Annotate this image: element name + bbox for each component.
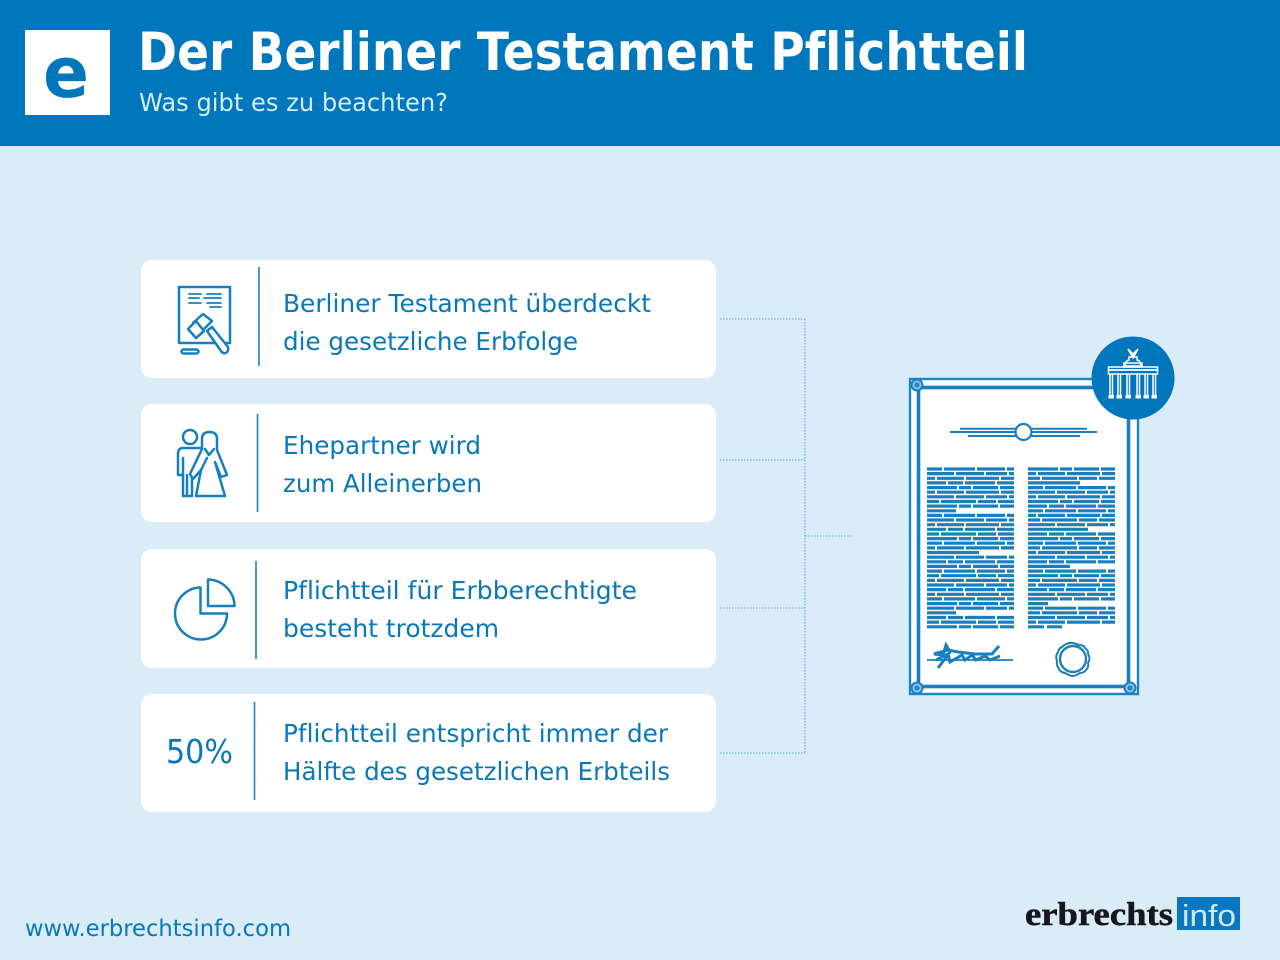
signature (927, 645, 1013, 668)
logo: e mark: e (43, 32, 89, 114)
text: card 3 (283, 576, 637, 643)
badge: Brandenburg Gate (1092, 336, 1174, 420)
logo: e mark (25, 30, 110, 115)
figure: 50 percent: 50% (166, 732, 233, 771)
subtitle: Was gibt es zu beachten? (139, 88, 448, 117)
text: card 2: zum Alleinerben (283, 469, 482, 498)
text: card 2: Ehepartner wird (283, 431, 481, 460)
icon: document with gavel (179, 287, 230, 354)
header banner (0, 0, 1280, 146)
text: card 4: Hälfte des gesetzlichen Erbteils (283, 757, 670, 786)
brand logo: erbrechts info (1025, 897, 1240, 933)
text: card 2 (283, 431, 482, 498)
text: card 4: Pflichtteil entspricht immer der (283, 719, 669, 748)
text: card 1 (283, 289, 651, 356)
text: card 3: Pflichtteil für Erbberechtigte (283, 576, 637, 605)
brand logo: erbrechts info: erbrechts (1025, 897, 1173, 933)
text: card 4 (283, 719, 670, 786)
connector lines (720, 319, 851, 753)
document right text column (1028, 469, 1115, 627)
document left text column (927, 469, 1014, 627)
icon: pie chart (175, 580, 234, 639)
panel: card 1 (141, 260, 716, 378)
text: card 1: Berliner Testament überdeckt (283, 289, 651, 318)
panel: card 3 (141, 549, 716, 668)
footer url: www.erbrechtsinfo.com (25, 916, 291, 942)
panel: card 2 (141, 404, 716, 522)
icon: married couple (178, 430, 227, 496)
document corner ornaments (912, 380, 1136, 694)
text: card 1: die gesetzliche Erbfolge (283, 327, 578, 356)
title: Der Berliner Testament Pflichtteil (138, 22, 1028, 83)
brand logo: erbrechts info: info (1182, 898, 1236, 933)
panel: card 4 (141, 694, 716, 812)
document: Berlin testament (910, 379, 1138, 694)
document heading ornament (950, 424, 1097, 440)
wax seal (1056, 643, 1090, 676)
text: card 3: besteht trotzdem (283, 614, 499, 643)
